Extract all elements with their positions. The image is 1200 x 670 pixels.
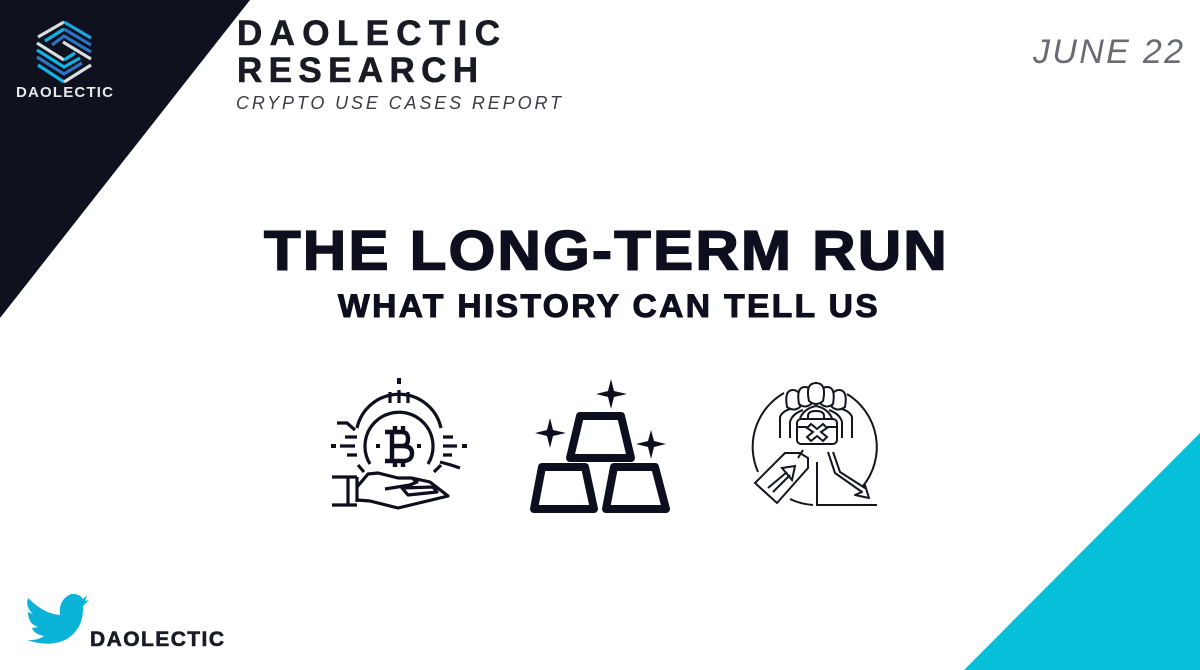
heading: Daolectic Research: DAOLECTIC: [237, 14, 500, 53]
panel: cyan corner triangle: [964, 433, 1200, 670]
twitter handle text: DAOLECTIC: [90, 628, 224, 651]
gold bar top: [570, 416, 631, 458]
panel: dark corner triangle: [0, 0, 250, 318]
title: THE LONG-TERM RUN: [264, 220, 947, 282]
icon: hand holding bitcoin: [331, 378, 467, 508]
heading: Daolectic Research: [237, 14, 500, 90]
gold bar left: [534, 467, 594, 509]
icon: hexagon logo: [37, 22, 91, 82]
gold bar right: [606, 467, 666, 509]
logo: Daolectic: [16, 22, 113, 101]
icon: twitter bird: [27, 594, 89, 644]
icon: gold bars: [534, 379, 666, 509]
footer: twitter handle: [27, 594, 224, 651]
subheading: report name: CRYPTO USE CASES REPORT: [236, 93, 563, 113]
icon: people, briefcase and falling price: [753, 383, 877, 505]
date: JUNE 22: [1032, 33, 1183, 71]
logo wordmark: DAOLECTIC: [16, 84, 113, 101]
subtitle: WHAT HISTORY CAN TELL US: [338, 288, 878, 324]
sparkles: [535, 379, 666, 459]
heading: Daolectic Research: RESEARCH: [237, 51, 478, 90]
